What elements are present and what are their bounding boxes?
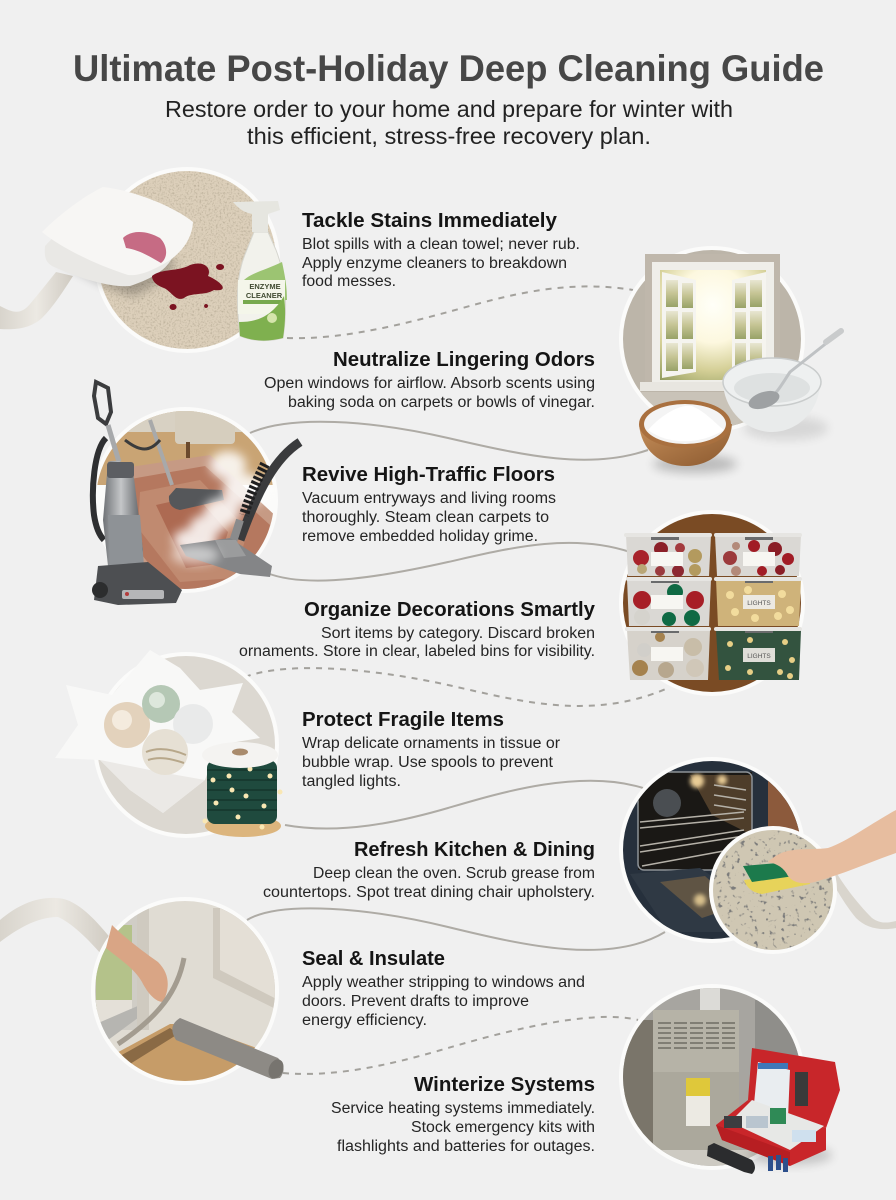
body: doors. Prevent drafts to improve (302, 993, 529, 1010)
body (302, 236, 580, 290)
heading: Protect Fragile Items (302, 708, 504, 731)
body: baking soda on carpets or bowls of vinegar. (288, 394, 595, 411)
icon: window (640, 254, 790, 391)
body (331, 1100, 595, 1155)
connector: dashed seal to systems (283, 1017, 638, 1074)
icon: red emergency kit (716, 1048, 840, 1166)
icon: pink stain on towel (123, 232, 166, 263)
icon: batteries (768, 1155, 788, 1172)
step 3 text (302, 463, 556, 545)
illustration: stain removal (42, 167, 287, 353)
icon: draft stopper roll (172, 1018, 286, 1081)
body (263, 865, 595, 901)
icon: steam wand and head (171, 442, 300, 577)
body: Stock emergency kits with (411, 1119, 595, 1136)
connector: solid odors to floors (250, 422, 648, 460)
illustration: wrapped ornaments and light spool (94, 652, 282, 838)
heading: Organize Decorations Smartly (304, 598, 596, 621)
connector: dashed stains to odors (287, 286, 633, 338)
body: Open windows for airflow. Absorb scents using (264, 375, 595, 392)
icon: bin row 2 left (626, 577, 712, 626)
icon: upright vacuum (92, 382, 182, 605)
body: Service heating systems immediately. (331, 1100, 595, 1117)
icon: sponge and hand (743, 810, 896, 894)
illustration: vacuum and steam cleaner (92, 382, 300, 605)
ribbon: lower left (0, 898, 112, 960)
body: Apply enzyme cleaners to breakdown (302, 255, 567, 272)
connector: dashed decorations to fragile items (245, 668, 668, 706)
icon: bin row 2 right (714, 577, 802, 626)
step 2 text (264, 348, 595, 411)
icon: granite countertop (709, 826, 837, 954)
label: enzyme cleaner (246, 282, 283, 300)
body: Blot spills with a clean towel; never rub. (302, 236, 580, 253)
body: ornaments. Store in clear, labeled bins for visibility. (239, 643, 595, 660)
heading: Refresh Kitchen & Dining (354, 838, 595, 861)
ribbon: right (832, 872, 896, 929)
step 7 text (302, 947, 585, 1029)
icon: hand and weather strip (106, 925, 184, 1044)
body (302, 490, 556, 545)
icon: tissue paper (55, 650, 260, 813)
icon: spool of lights (202, 742, 282, 837)
body: flashlights and batteries for outages. (337, 1138, 595, 1155)
step 1 text (302, 209, 580, 290)
subtitle: Restore order to your home and prepare for winter with (165, 96, 733, 122)
icon: wine spill (152, 263, 224, 310)
icon: bin row 3 right (714, 627, 802, 680)
icon: spray bottle (233, 201, 287, 341)
illustration: oven and countertop (619, 757, 896, 954)
icon: furnace (653, 1010, 739, 1150)
label: lights bin: LIGHTS (747, 653, 771, 660)
icon: steam (173, 451, 267, 552)
label: enzyme cleaner: CLEANER (246, 291, 283, 300)
body: thoroughly. Steam clean carpets to (302, 509, 549, 526)
subtitle: this efficient, stress-free recovery plan. (247, 123, 651, 149)
connector: solid kitchen to seal (247, 908, 665, 950)
step 4 text (239, 598, 596, 660)
illustration: weather stripping and door (91, 897, 290, 1090)
body: Apply weather stripping to windows and (302, 974, 585, 991)
ribbon: top left (0, 272, 73, 329)
body (302, 735, 560, 790)
subtitle (165, 96, 733, 149)
icon: flashlight (707, 1143, 755, 1174)
body: countertops. Spot treat dining chair upholstery. (263, 884, 595, 901)
connector: solid floors to decorations (267, 543, 630, 581)
icon: vacuum floor head (169, 488, 224, 510)
body: food messes. (302, 273, 396, 290)
heading: Tackle Stains Immediately (302, 209, 558, 232)
heading: Neutralize Lingering Odors (333, 348, 595, 371)
step 5 text (302, 708, 560, 790)
heading: Winterize Systems (414, 1073, 595, 1096)
step 6 text (263, 838, 595, 901)
icon: bowl of vinegar with spoon (723, 331, 841, 440)
illustration: furnace and emergency kit (619, 984, 840, 1174)
icon: bin row 1 left (624, 533, 712, 577)
icon: folded towel (42, 187, 193, 296)
body: bubble wrap. Use spools to prevent (302, 754, 554, 771)
label: enzyme cleaner: ENZYME (249, 282, 281, 291)
body: Deep clean the oven. Scrub grease from (313, 865, 595, 882)
body (302, 974, 585, 1029)
body: energy efficiency. (302, 1012, 427, 1029)
body: tangled lights. (302, 773, 401, 790)
label: lights: LIGHTS (747, 600, 771, 607)
icon: bin row 3 left (625, 627, 711, 680)
heading: Revive High-Traffic Floors (302, 463, 555, 486)
body: Vacuum entryways and living rooms (302, 490, 556, 507)
step 8 text (331, 1073, 595, 1155)
icon: bowl of baking soda (639, 400, 737, 473)
icon: ornaments (104, 685, 213, 775)
connector: solid fragile items to kitchen (285, 781, 643, 829)
icon: bin row 1 right (714, 533, 802, 576)
body: Wrap delicate ornaments in tissue or (302, 735, 560, 752)
illustration: labeled storage bins (619, 510, 805, 696)
body: Sort items by category. Discard broken (321, 625, 595, 642)
illustration: open window with baking soda and vinegar (619, 246, 841, 473)
body (239, 625, 595, 660)
body (264, 375, 595, 411)
body: remove embedded holiday grime. (302, 528, 538, 545)
heading: Seal & Insulate (302, 947, 445, 970)
title: Ultimate Post-Holiday Deep Cleaning Guide (73, 48, 824, 89)
